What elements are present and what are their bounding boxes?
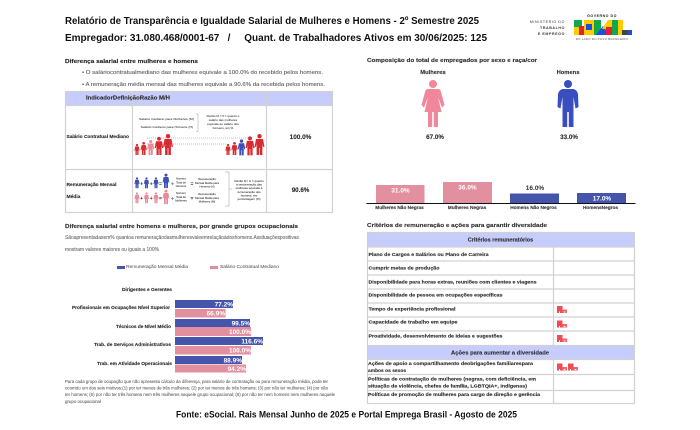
figure: homens	[557, 70, 579, 141]
diagram: remuneração média: porcentagem (%)	[237, 197, 261, 201]
bar chart: grupos ocupacionais: Profissionais em Ocupações Nível Superior	[72, 305, 170, 311]
diagram: remuneração média	[134, 172, 264, 206]
diagram: remuneração média: Total de	[176, 195, 186, 199]
panel: tabela de critérios: Ações para aumentar a diversidade	[451, 350, 550, 356]
diagram: remuneração média: Remuneração	[198, 177, 216, 181]
heading: critérios: Critérios de remuneração e ações para garantir diversidade	[367, 223, 548, 229]
panel: tabela de critérios: Políticas de contratação de mulheres (negras, com deficiência, em	[368, 376, 537, 382]
logo: ministério e governo: TRABALHO	[540, 26, 565, 30]
diagram: salário mediano	[134, 114, 264, 155]
bar chart: sexo e raça: Mulheres Negras	[448, 205, 487, 210]
figure: homens: 33.0%	[560, 134, 578, 141]
bar chart: sexo e raça: HomensNegros	[583, 205, 618, 210]
table header: IndicadorDefiniçãoRazão M/H	[86, 96, 170, 102]
bar chart: sexo e raça: 17.0%	[593, 196, 611, 202]
diagram: remuneração média: +	[150, 182, 153, 188]
figure: homens: Homens	[557, 70, 579, 76]
bar chart: grupos ocupacionais: 116.6%	[241, 338, 263, 346]
logo: ministério e governo: E EMPREGO	[538, 32, 565, 36]
diagram: remuneração média: Mensal Média para	[195, 196, 219, 200]
diagram: remuneração média: +	[150, 196, 153, 202]
panel: tabela de critérios: Políticas de promoção de mulheres para cargo de direção e gerência	[368, 392, 540, 398]
panel: tabela de critérios	[367, 232, 635, 404]
diagram: remuneração média: homens, em	[241, 193, 258, 197]
diagram: remuneração média: =	[159, 182, 162, 188]
diagram: remuneração média: +	[140, 196, 143, 202]
panel: tabela de critérios: Cumprir metas de produção	[368, 266, 440, 272]
diagram: remuneração média: =	[159, 196, 162, 202]
text block: nota de rodapé: Para cada grupo de ocupação que não apresenta cálculo da diferença, para salário de contratação ou para remuneração média, pode ter	[65, 379, 329, 384]
row: remuneração mensal média: Média	[66, 194, 81, 200]
diagram: remuneração média: Homens (H)	[199, 184, 215, 188]
heading: composição: Composição do total de empregados por sexo e raça/cor	[367, 58, 538, 64]
legend: Salário Contratual Mediano	[220, 264, 279, 269]
row: remuneração mensal média: Remuneração Mensal	[66, 182, 117, 188]
bar chart: sexo e raça: Mulheres Não Negras	[375, 205, 424, 210]
bar chart: grupos ocupacionais	[72, 287, 263, 373]
diagram: remuneração média: Razão M / H = quanto	[234, 179, 264, 183]
text block: explicação: mostram valores maiores ou iguais a 100%	[65, 247, 160, 253]
panel: tabela de critérios: Disponibilidade para horas extras, reuniões com clientes e viagens	[368, 280, 537, 286]
bar chart: grupos ocupacionais: 88.9%	[224, 358, 242, 364]
bar chart: grupos ocupacionais: 94.2%	[228, 366, 246, 373]
diagram: salário mediano: Salário mediano para Homens (H)	[141, 125, 193, 129]
diagram: salário mediano: Razão M / H = quanto o	[207, 114, 240, 118]
bar chart: grupos ocupacionais: Técnicos de Nível Médio	[116, 324, 171, 330]
diagram: remuneração média: mulheres equivale à	[236, 186, 263, 190]
bar chart: sexo e raça: 16.0%	[526, 185, 544, 192]
figure: mulheres: 67.0%	[426, 134, 444, 141]
diagram: remuneração média: Mulheres (M)	[199, 200, 215, 204]
panel: tabela de critérios: Capacidade de trabalho em equipe	[368, 320, 458, 326]
diagram: remuneração média: Mulheres	[175, 198, 187, 202]
bar chart: grupos ocupacionais: Trab. em Atividade Operacionais	[97, 361, 172, 367]
bar chart: grupos ocupacionais: 66.9%	[207, 311, 225, 318]
panel: tabela de critérios: Plano de Cargos e Salários ou Plano de Carreira	[368, 252, 489, 258]
bar chart: sexo e raça: Homens Não Negros	[510, 205, 557, 210]
text block: nota de rodapé	[65, 379, 336, 404]
bar chart: grupos ocupacionais: 100.0%	[229, 329, 251, 336]
heading: grupos ocupacionais: Diferença salarial entre homens e mulheres, por grande grupos ocupacionais	[65, 224, 298, 230]
section: critérios remuneratórios: Critérios remuneratórios	[468, 238, 533, 244]
text block: resumo: • O saláriocontratualmediano das mulheres equivale a 100.0% do recebido pelos homens.	[82, 70, 323, 76]
logo: ministério e governo	[530, 14, 632, 41]
bar chart: grupos ocupacionais: 99.5%	[232, 320, 250, 328]
diagram: salário mediano: Salário mediano para Mulheres (M)	[139, 117, 194, 121]
diagram: remuneração média: Número	[176, 176, 186, 180]
figure: mulheres: Mulheres	[420, 70, 446, 76]
heading: diferença salarial: Diferença salarial entre mulheres e homens	[65, 59, 198, 65]
fonte: Fonte: eSocial. Rais Mensal Junho de 2025 e Portal Emprega Brasil - Agosto de 2025	[176, 410, 517, 420]
row: remuneração mensal média	[66, 172, 310, 206]
diagram: salário mediano: salário das mulheres	[209, 118, 238, 122]
title	[65, 15, 487, 44]
row: salário contratual mediano: Salário Contratual Mediano	[66, 134, 129, 140]
diagram: remuneração média: =	[191, 182, 194, 188]
row: salário contratual mediano	[66, 114, 312, 155]
title: Empregador: 31.080.468/0001-67 / Quant. de Trabalhadores Ativos em 30/06/2025: 125	[65, 32, 487, 44]
legend: Remuneração Mensal Média	[126, 264, 188, 269]
text block: resumo	[82, 70, 325, 88]
diagram: remuneração média: Total de	[176, 180, 186, 184]
diagram: remuneração média: Remuneração	[198, 192, 216, 196]
diagram: remuneração média: ÷	[171, 196, 174, 202]
figure: mulheres	[420, 70, 446, 141]
text block: explicação: Sãoapresentadasem% quantoa remuneraçãodasmulheresvaleemrelaçãoàdoshomens.Assituaçõespositivas	[65, 235, 299, 241]
diagram: remuneração média: remuneração dos	[237, 190, 261, 194]
diagram: remuneração média: Homens	[176, 184, 187, 188]
text block: nota de rodapé: ter homens; (5) por não ter três homens nem três mulheres naquele grupo ocupacional; (6) por não ter nem homens nem mulheres naquele	[65, 392, 336, 397]
bar chart: grupos ocupacionais: Trab. de Serviços Administrativos	[94, 342, 171, 348]
panel: tabela de critérios: Tempo de experiência profissional	[368, 306, 456, 312]
diagram: remuneração média: +	[140, 182, 143, 188]
panel: tabela de critérios: Ações de apoio a compartilhamento deobrigações familiarespara	[368, 361, 533, 367]
text block: nota de rodapé: ocorrido um dos seis motivos:(1) por ter menos de três mulheres; (2) por ter menos de três homens; (3) por não ter mulheres; (4) por não	[65, 386, 329, 390]
panel: tabela de critérios: situação de violência, chefes de família, LGBTQIA+, Indígenas)	[368, 384, 527, 390]
logo: ministério e governo: MINISTÉRIO DO	[530, 19, 565, 24]
panel: tabela de critérios: ambos os sexos	[368, 368, 406, 374]
diagram: remuneração média: =	[191, 196, 194, 202]
panel: tabela de critérios: Disponibilidade de pessoa em ocupações específicas	[368, 292, 503, 298]
bar chart: sexo e raça: 36.0%	[458, 184, 477, 192]
logo: ministério e governo: DO LADO DO POVO BRASILEIRO	[576, 37, 629, 41]
text block: explicação	[65, 235, 299, 253]
diagram: remuneração média: a remuneração das	[236, 183, 262, 187]
panel: tabela de indicadores	[65, 91, 333, 213]
text block: nota de rodapé: grupo ocupacional	[65, 399, 101, 404]
bar chart: grupos ocupacionais: 100.0%	[229, 347, 251, 354]
legend	[117, 264, 279, 269]
diagram: remuneração média: Mensal Média para	[195, 181, 219, 185]
row: remuneração mensal média: 90.6%	[292, 187, 310, 194]
diagram: salário mediano: equivale ao salário dos	[207, 122, 239, 126]
title: Relatório de Transparência e Igualdade Salarial de Mulheres e Homens - 2º Semestre 2025	[65, 15, 479, 27]
row: salário contratual mediano: 100.0%	[290, 134, 312, 141]
text block: resumo: • A remuneração média mensal das mulheres equivale a 90.6% da recebida pelos homens.	[82, 82, 325, 88]
bar chart: sexo e raça: 31.0%	[391, 188, 410, 194]
bar chart: grupos ocupacionais: 77.2%	[215, 302, 233, 308]
icons: marcadores	[557, 306, 578, 370]
bar chart: grupos ocupacionais: Dirigentes e Gerentes	[122, 287, 172, 293]
diagram: remuneração média: Número	[176, 191, 186, 195]
bar chart: sexo e raça	[366, 182, 636, 210]
panel: tabela de critérios: Proatividade, desenvolvimento de ideias e sugestões	[368, 334, 503, 340]
logo: ministério e governo: GOVERNO DO	[587, 14, 617, 18]
diagram: remuneração média: ÷	[171, 182, 174, 188]
diagram: salário mediano: homens, em %	[213, 126, 234, 130]
